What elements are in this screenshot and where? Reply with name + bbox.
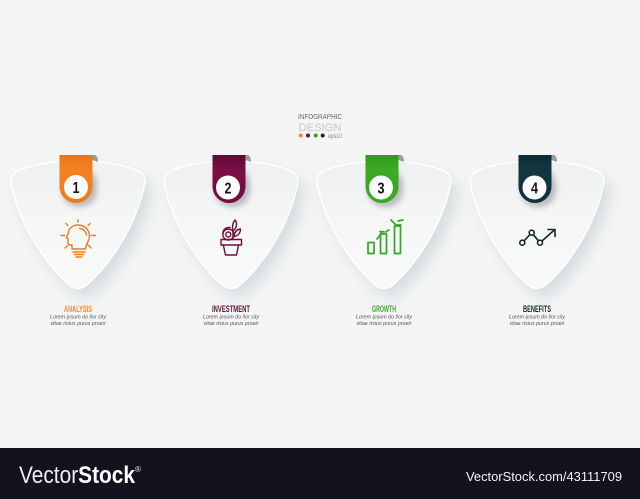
description: [50, 314, 107, 327]
logo: infographic design: DESIGN: [298, 122, 342, 134]
title: BENEFITS: [523, 304, 551, 314]
footer url: VectorStock.com/43111709: [466, 469, 622, 484]
description: [203, 314, 260, 327]
title: ANALYSIS: [64, 304, 92, 314]
card shape: [164, 161, 298, 288]
description: vitae risius purus proeir: [204, 321, 259, 327]
registered mark: ®: [135, 465, 141, 474]
logo: infographic design: [298, 114, 343, 140]
description: Lorem ipsum do llor sity: [50, 314, 107, 320]
card shape: [11, 161, 145, 288]
logo: infographic design: eps10: [328, 134, 343, 140]
description: [509, 314, 566, 327]
panel: step 2 investment: [164, 155, 305, 327]
ribbon: 3: [378, 180, 385, 198]
description: vitae risius purus proeir: [510, 321, 565, 327]
card shape: [470, 161, 604, 288]
ribbon: [60, 155, 98, 207]
panel: step 4 benefits: [470, 155, 611, 327]
ribbon: 1: [72, 180, 80, 197]
panel: step 1 analysis: [11, 155, 152, 327]
ribbon: 2: [224, 180, 232, 198]
icon: growth bars: [368, 220, 403, 254]
description: vitae risius purus proeir: [356, 321, 412, 327]
description: [356, 314, 413, 327]
ribbon: [366, 155, 404, 207]
icon: trend line arrow: [520, 230, 555, 245]
footer logo: VectorStock: [19, 462, 136, 489]
panel: step 3 growth: [317, 155, 458, 327]
icon: plant pot with coin: [221, 220, 242, 255]
description: vitae risius purus proeir: [50, 321, 106, 327]
ribbon: [212, 155, 251, 207]
logo: infographic design: INFOGRAPHIC: [298, 114, 342, 121]
description: Lorem ipsum do llor sity: [203, 314, 260, 320]
footer bar: [0, 448, 640, 499]
ribbon: 4: [531, 180, 538, 198]
description: Lorem ipsum do llor sity: [356, 314, 413, 320]
description: Lorem ipsum do llor sity: [509, 314, 566, 320]
ribbon: [518, 155, 557, 207]
icon: head in light bulb: [61, 220, 96, 257]
title: INVESTMENT: [212, 304, 250, 314]
card shape: [317, 161, 451, 288]
title: GROWTH: [372, 304, 396, 314]
